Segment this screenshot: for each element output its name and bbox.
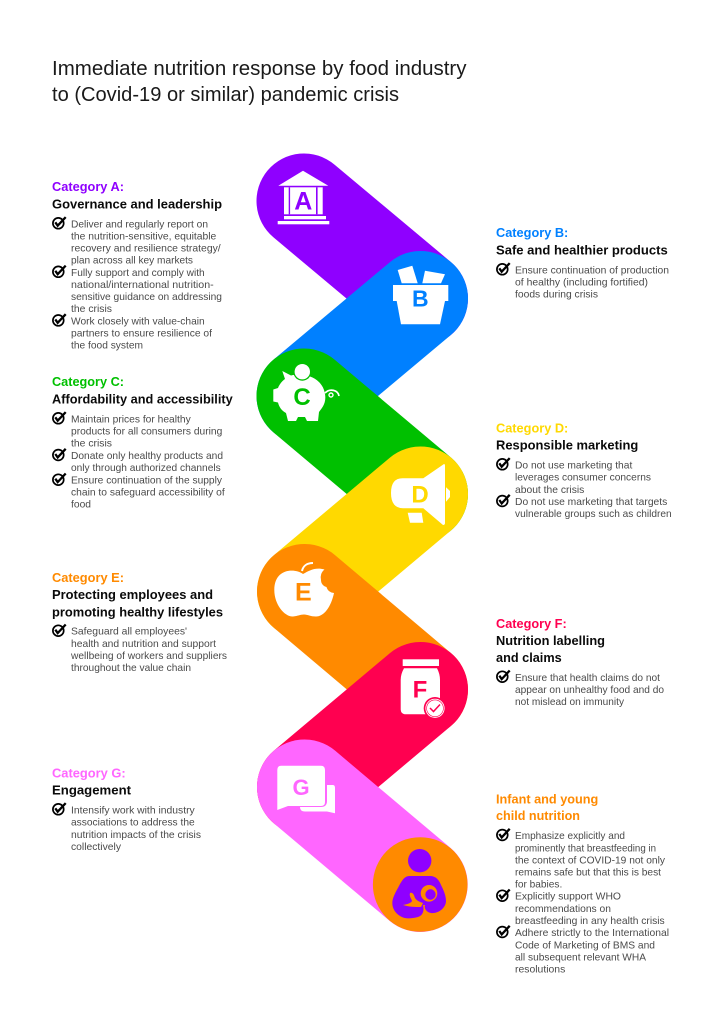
panel: category F: and claims (496, 650, 562, 665)
bullet infant 2: recommendations on (515, 903, 611, 915)
bullet D1: leverages consumer concerns (515, 472, 651, 484)
title: to (Covid-19 or similar) pandemic crisis (52, 83, 399, 106)
bullet infant 1: Emphasize explicitly and (515, 830, 625, 842)
bullet A2: the crisis (71, 303, 112, 315)
bullet F1: not mislead on immunity (515, 696, 625, 708)
panel: category G (52, 766, 201, 853)
bullet C1: products for all consumers during (71, 425, 222, 437)
pill: category D (304, 494, 420, 592)
title: Immediate nutrition response by food industry (52, 57, 467, 80)
icon: basket B (393, 266, 448, 324)
heading B: Safe and healthier products (496, 242, 668, 258)
category label D: Category D: (496, 420, 568, 436)
bullet G1: associations to address the (71, 817, 195, 829)
bullet C3: food (71, 499, 91, 511)
pill: category A (304, 201, 420, 298)
panel: category D (496, 420, 672, 520)
category label A: Category A: (52, 179, 124, 194)
icon: megaphone D (391, 464, 450, 525)
bullet infant 1: for babies. (515, 879, 562, 891)
heading infant: child nutrition (496, 808, 580, 823)
bullet C3 (53, 474, 225, 511)
heading E: Protecting employees and (52, 587, 213, 602)
heading F: Nutrition labelling (496, 633, 605, 648)
pill: category B (304, 298, 420, 396)
icon: speech bubbles G (277, 766, 335, 813)
category label F: Category F: (496, 616, 567, 631)
bullet F1: appear on unhealthy food and do (515, 684, 664, 696)
bullet B1: foods during crisis (515, 289, 598, 301)
heading A: Governance and leadership (52, 196, 222, 212)
bullet C1: Maintain prices for healthy (71, 413, 191, 425)
bullet A3 (53, 314, 212, 352)
bullet G1 (53, 803, 201, 853)
bullet E1: throughout the value chain (71, 662, 191, 674)
bullet D2: vulnerable groups such as children (515, 508, 672, 520)
bullet A1: recovery and resilience strategy/ (71, 243, 221, 255)
pill: category F (304, 690, 420, 787)
heading C: Affordability and accessibility (52, 392, 233, 406)
bullet B1: Ensure continuation of production (515, 264, 669, 276)
bullet C2: only through authorized channels (71, 462, 221, 474)
category label B: Category B: (496, 225, 568, 240)
pill: category E (304, 592, 420, 690)
panel: infant and young child nutrition (496, 792, 669, 976)
bullet A2 (53, 266, 222, 315)
zigzag ribbon chart (304, 201, 468, 932)
bullet F1 (497, 670, 664, 708)
bullet E1: wellbeing of workers and suppliers (70, 650, 227, 662)
bullet G1: Intensify work with industry (71, 804, 195, 816)
bullet infant 2: Explicitly support WHO (515, 891, 621, 903)
icon: speech bubbles G: G (292, 775, 310, 800)
heading D: Responsible marketing (496, 438, 638, 452)
bullet A1: Deliver and regularly report on (71, 218, 208, 230)
heading infant (496, 792, 598, 823)
panel: category F (496, 616, 664, 708)
title (52, 57, 467, 106)
bullet D1 (497, 458, 651, 496)
bullet A2: sensitive guidance on addressing (71, 291, 222, 303)
bullet C1: the crisis (71, 438, 112, 450)
bullet infant 1 (497, 829, 666, 891)
category label E: Category E: (52, 570, 124, 585)
bullet G1: nutrition impacts of the crisis (71, 829, 201, 841)
icon: breastfeeding mother and child (392, 849, 446, 918)
icon: piggy bank C: C (293, 384, 311, 411)
bullet D1: Do not use marketing that (515, 460, 632, 472)
icon: jar F: F (413, 677, 427, 704)
bullet infant 1: prominently that breastfeeding in (515, 842, 656, 854)
icon: apple E: E (295, 579, 312, 607)
bullet infant 3 (497, 926, 669, 976)
bullet A1 (53, 217, 221, 267)
bullet D1: about the crisis (515, 484, 584, 496)
bullet F1: Ensure that health claims do not (515, 672, 660, 684)
category label G: Category G: (52, 766, 126, 780)
bullet C3: Ensure continuation of the supply (71, 475, 223, 487)
bullet D2: Do not use marketing that targets (515, 496, 667, 508)
icon: piggy bank C (273, 363, 339, 421)
panel: category C (52, 374, 233, 511)
bullet A3: the food system (71, 340, 143, 352)
panel: category E (52, 570, 227, 674)
bullet A2: Fully support and comply with (71, 267, 205, 279)
category label C: Category C: (52, 374, 124, 389)
heading infant: Infant and young (496, 792, 598, 806)
icon: apple E (274, 563, 334, 617)
bullet infant 3: Adhere strictly to the International (515, 927, 669, 939)
bullet G1: collectively (71, 841, 122, 853)
panel: category B (496, 225, 669, 301)
bullet A3: partners to ensure resilience of (71, 328, 212, 340)
bullet A1: the nutrition-sensitive, equitable (71, 230, 216, 242)
bullet A3: Work closely with value-chain (71, 315, 205, 327)
icon: megaphone D: D (411, 482, 429, 509)
panel: category E: promoting healthy lifestyles (52, 604, 223, 620)
bullet infant 2 (497, 890, 665, 927)
bullet infant 3: resolutions (515, 964, 565, 976)
bullet infant 1: the context of COVID-19 not only (515, 854, 666, 866)
panel: category A (52, 179, 222, 352)
bullet A1: plan across all key markets (71, 255, 193, 267)
bullet infant 2: breastfeeding in any health crisis (515, 915, 665, 927)
bullet C2: Donate only healthy products and (71, 450, 223, 462)
bullet C2 (53, 449, 223, 474)
bullet E1: health and nutrition and support (71, 638, 216, 650)
icon: basket B: B (412, 286, 429, 312)
bullet C3: chain to safeguard accessibility of (71, 487, 225, 499)
bullet C1 (53, 412, 222, 450)
bullet infant 3: all subsequent relevant WHA (515, 951, 646, 963)
bullet B1: of healthy (including fortified) (515, 276, 648, 288)
heading G: Engagement (52, 782, 132, 798)
bullet D2 (497, 495, 672, 520)
circle: infant and young child nutrition (373, 837, 468, 932)
pill: category C (304, 396, 420, 494)
bullet infant 3: Code of Marketing of BMS and (515, 939, 655, 951)
bullet B1 (497, 263, 669, 301)
icon: building A: A (294, 187, 312, 215)
bullet infant 1: remains safe but that this is best (515, 867, 661, 879)
icon: jar F (401, 659, 446, 720)
pill: category G (304, 787, 420, 884)
bullet E1 (53, 624, 227, 674)
icon: building A (278, 171, 329, 224)
bullet E1: Safeguard all employees' (71, 626, 187, 638)
bullet A2: national/international nutrition- (71, 279, 214, 291)
